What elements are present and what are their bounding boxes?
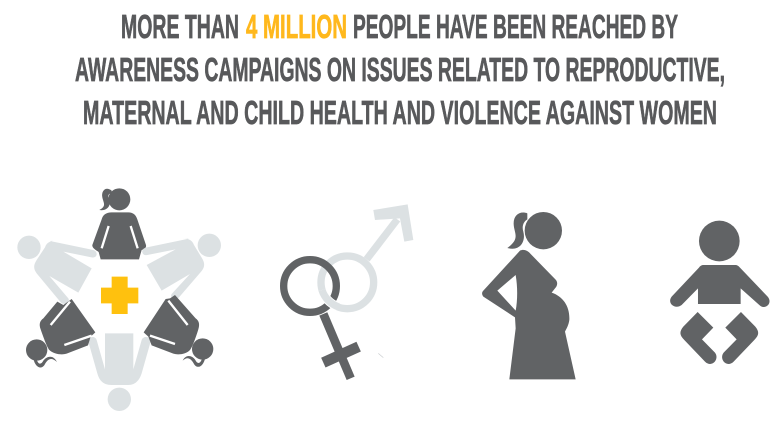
title: MORE THAN — [121, 9, 239, 46]
icon: baby in diaper — [670, 221, 770, 364]
interlocking arc of male ring — [322, 290, 338, 307]
male symbol — [321, 204, 413, 309]
figure: upper right man — [142, 234, 221, 299]
figure: top woman — [92, 188, 146, 259]
figure: upper left man — [17, 236, 97, 304]
title — [75, 9, 725, 132]
icon: circle of women and men around a health cross — [17, 188, 221, 411]
icon: pregnant woman — [482, 212, 576, 379]
figure: bottom man — [88, 333, 151, 411]
figure: lower right woman — [144, 295, 213, 367]
figure: lower left woman — [26, 299, 95, 367]
female symbol — [284, 260, 359, 378]
title: 4 MILLION — [246, 9, 347, 46]
icon: interlocked gender symbols — [284, 204, 413, 378]
icon: yellow medical cross — [101, 277, 138, 314]
